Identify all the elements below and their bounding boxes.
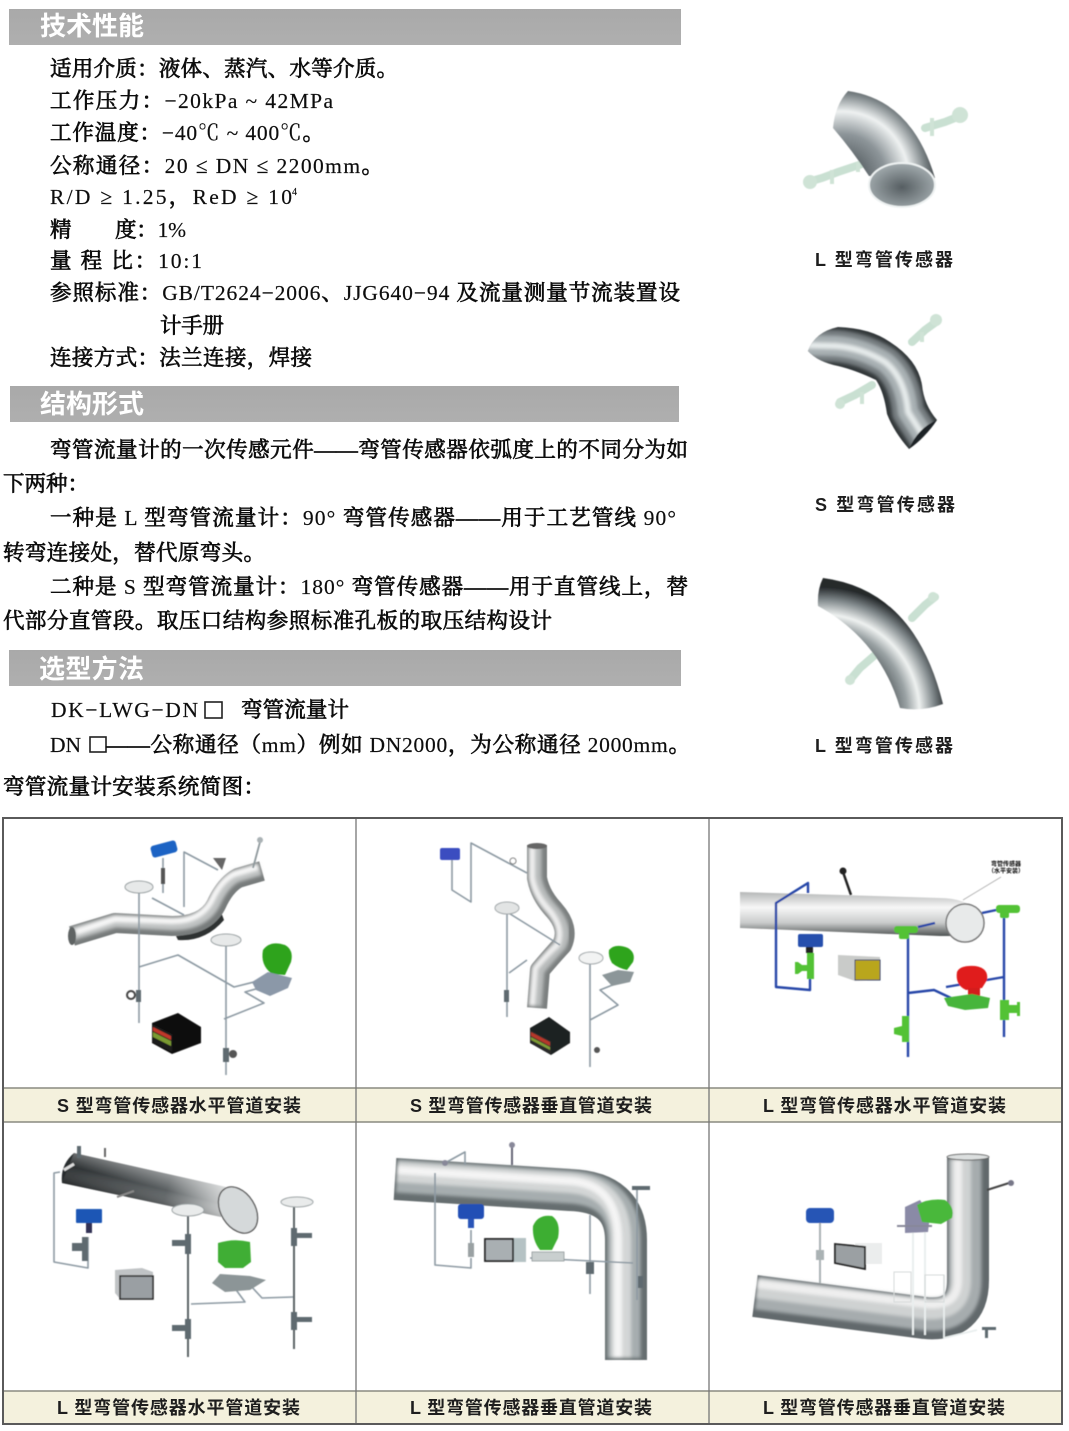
icon: display box — [855, 1243, 882, 1264]
caption: L type sensor: L 型弯管传感器 — [815, 735, 953, 756]
heading: 技术性能 — [9, 9, 681, 45]
diagram: S sensor horizontal — [68, 837, 292, 1075]
text block: model selection — [50, 698, 690, 758]
icon: display box — [838, 955, 880, 981]
icon: green valves — [795, 905, 1020, 1042]
text block: structure description: 代部分直管段。取压口结构参照标准孔板的取压结构设计 — [3, 609, 552, 633]
icon: green transmitter — [262, 943, 292, 975]
caption band: row 1 — [3, 1088, 1062, 1122]
icon: display box — [530, 1017, 570, 1055]
diagram: L sensor horizontal, tilted pipe — [54, 1146, 313, 1357]
icon: blue transmitter — [458, 1204, 484, 1219]
icon: instruments and green transmitter — [905, 1200, 930, 1233]
heading: 技术性能: 技术性能 — [40, 11, 144, 41]
text block: structure description: 下两种： — [3, 472, 89, 496]
icon: blue transmitter — [150, 840, 178, 858]
diagram: S sensor vertical — [440, 843, 634, 1067]
icon: green transmitter — [533, 1216, 559, 1250]
icon: blue transmitter — [76, 1209, 102, 1223]
text block: structure description: 二种是 S 型弯管流量计：180° 弯管传感器——用于直管线上，替 — [50, 575, 688, 600]
sensor: L type elbow 2 — [818, 578, 943, 709]
caption band: row 2 — [3, 1391, 1062, 1424]
heading: 结构形式 — [10, 386, 679, 422]
text block: technical specifications: 度：1% — [115, 218, 186, 242]
text block: technical specifications: 公称通径：20 ≤ DN ≤ 2200mm。 — [50, 154, 383, 178]
text block: model selection: ——公称通径（mm）例如 DN2000，为公称通径 2000mm。 — [105, 733, 690, 758]
text block: technical specifications: 适用介质：液体、蒸汽、水等介质。 — [50, 57, 398, 81]
text block: structure description: 弯管流量计的一次传感元件——弯管传感器依弧度上的不同分为如 — [50, 438, 688, 462]
text block: technical specifications: 工作压力：−20kPa ~ 42MPa — [50, 89, 333, 113]
text block: technical specifications: 计手册 — [160, 314, 224, 338]
icon: blue transmitter — [806, 1208, 834, 1223]
text block: model selection: DK−LWG−DN — [51, 698, 198, 722]
heading: 选型方法: 选型方法 — [39, 654, 144, 684]
text block: technical specifications: 工作温度：−40℃ ~ 400℃。 — [50, 121, 324, 145]
text block: model selection: DN — [50, 733, 81, 757]
caption: L horizontal: L 型弯管传感器水平管道安装 — [57, 1397, 300, 1418]
diagram: L sensor vertical, down elbow — [395, 1142, 650, 1360]
callout: sensor label: （水平安装） — [988, 867, 1024, 875]
heading: 选型方法 — [9, 650, 681, 686]
text block: structure description — [3, 438, 688, 633]
icon: red transmitter — [957, 966, 987, 990]
icon: green transmitter — [609, 946, 634, 970]
icon: display box — [152, 1013, 201, 1054]
callout: sensor label: 弯管传感器 — [991, 860, 1021, 868]
text block: technical specifications: 精 — [50, 218, 72, 242]
icon: display box — [115, 1268, 153, 1299]
caption: L type sensor: L 型弯管传感器 — [815, 249, 953, 270]
text block: technical specifications: 4 — [292, 187, 297, 198]
callout: sensor label — [963, 860, 1024, 900]
caption: L horizontal: L 型弯管传感器水平管道安装 — [763, 1095, 1006, 1116]
caption: S type sensor: S 型弯管传感器 — [815, 494, 955, 515]
icon: display box — [484, 1238, 526, 1262]
caption: L vertical: L 型弯管传感器垂直管道安装 — [410, 1397, 652, 1418]
caption: L vertical: L 型弯管传感器垂直管道安装 — [763, 1397, 1005, 1418]
text block: technical specifications — [50, 57, 680, 371]
icon: green transmitter — [218, 1240, 251, 1268]
sensor: S type elbow — [808, 314, 942, 450]
text block: technical specifications: 参照标准：GB/T2624−2006、JJG640−94 及流量测量节流装置设 — [50, 281, 680, 305]
text block: structure description: 转弯连接处，替代原弯头。 — [3, 541, 265, 566]
text block: technical specifications: R/D ≥ 1.25，ReD ≥ 10 — [50, 185, 292, 210]
text block: technical specifications: 连接方式：法兰连接，焊接 — [50, 346, 312, 371]
heading: 结构形式: 结构形式 — [40, 389, 144, 419]
heading: installation diagram title: 弯管流量计安装系统简图： — [3, 775, 265, 799]
diagram: L sensor vertical, up elbow — [755, 1154, 1014, 1338]
icon: blue transmitter — [440, 848, 460, 860]
text block: structure description: 一种是 L 型弯管流量计：90° 弯管传感器——用于工艺管线 90° — [50, 506, 676, 530]
text block: model selection: 弯管流量计 — [241, 698, 349, 722]
sensor: L type elbow 1 — [803, 91, 968, 207]
caption: S horizontal: S 型弯管传感器水平管道安装 — [57, 1095, 301, 1116]
caption: S vertical: S 型弯管传感器垂直管道安装 — [410, 1095, 652, 1116]
table: installation diagrams — [3, 818, 1062, 1424]
diagram: L sensor horizontal — [740, 860, 1024, 1057]
icon: blue transmitter — [798, 934, 823, 947]
text block: technical specifications: 量 程 比：10:1 — [50, 249, 202, 273]
